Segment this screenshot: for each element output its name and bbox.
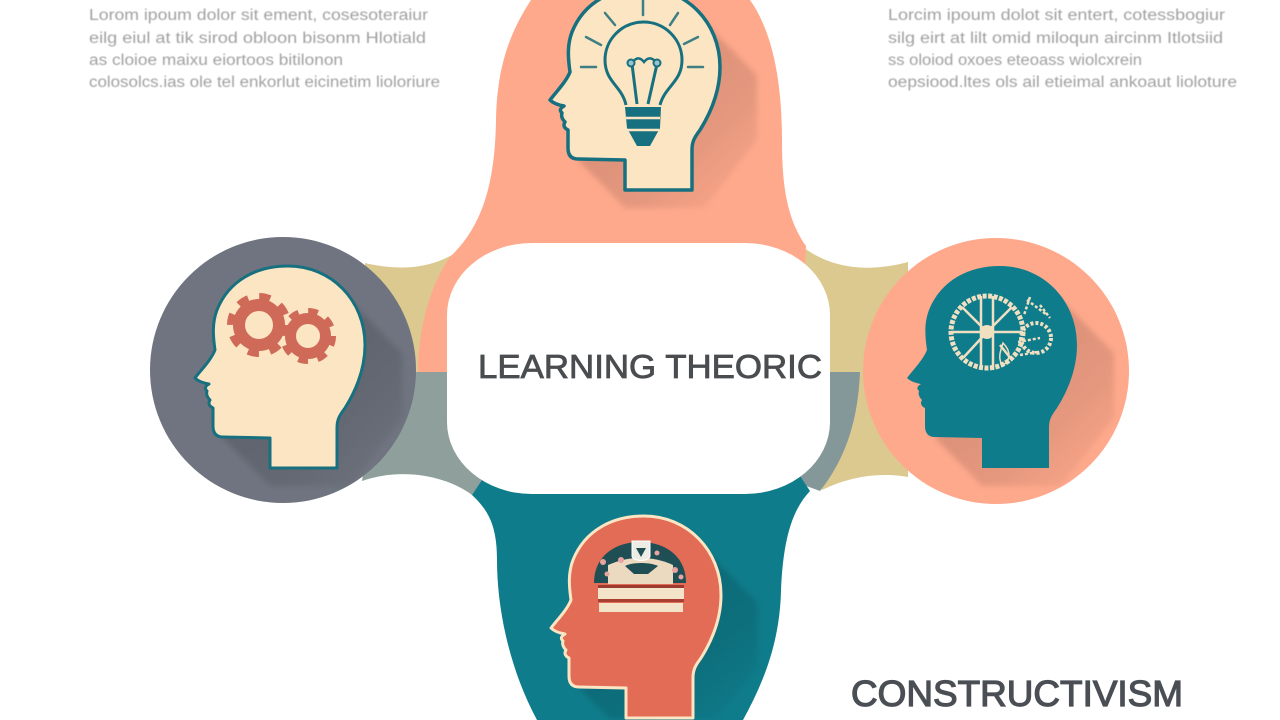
icon: head with wheel	[907, 266, 1114, 486]
panel: bottom teal lobe	[472, 476, 810, 720]
crown shield	[632, 541, 650, 560]
icon: head with gears	[195, 266, 402, 486]
title: center heading: LEARNING THEORIC	[478, 348, 822, 385]
panel: right salmon circle	[863, 238, 1129, 504]
crown strips	[598, 585, 684, 588]
panel: top salmon lobe	[418, 0, 806, 372]
text block: top left: eilg eiul at tik sirod obloon bisonm Hlotiald	[89, 30, 426, 47]
crown panel	[608, 558, 673, 584]
icon: head with crown	[551, 516, 758, 719]
light rays	[581, 0, 703, 67]
bulb base	[625, 107, 661, 146]
gear large	[231, 297, 287, 353]
text block: top left: as cloioe maixu eiortoos bitilonon	[89, 52, 343, 69]
text block: top right: ss oloiod oxoes eteoass wiolcxrein	[888, 52, 1142, 69]
bulb	[605, 22, 682, 105]
connector: left tan band	[360, 255, 452, 372]
crown flowers	[600, 550, 684, 580]
text block: top right	[888, 7, 1237, 91]
text block: top left: Lorom ipoum dolor sit ement, cosesoteraiur	[89, 7, 428, 24]
connector: left grey band	[362, 372, 482, 495]
connector: right tan band	[790, 247, 908, 490]
text block: top right: Lorcim ipoum dolot sit entert, cotessbogiur	[888, 7, 1225, 24]
text block: top left	[89, 7, 440, 91]
text block: top right: oepsiood.ltes ols ail etieimal ankoaut lioloture	[888, 74, 1237, 91]
gear small	[284, 312, 332, 360]
crown arch	[594, 542, 686, 583]
panel: left grey circle	[150, 237, 416, 503]
text block: top right: silg eirt at lilt omid miloqun aircinm Itlotsiid	[888, 30, 1223, 47]
heading: constructivism: CONSTRUCTIVISM	[851, 673, 1183, 714]
icon: head with light bulb	[550, 0, 757, 208]
text block: top left: colosolcs.ias ole tel enkorlut eicinetim lioloriure	[89, 74, 440, 91]
panel: center white rounded box	[447, 243, 830, 494]
connector: right grey band	[790, 372, 860, 491]
wheel drawing	[951, 296, 1051, 370]
